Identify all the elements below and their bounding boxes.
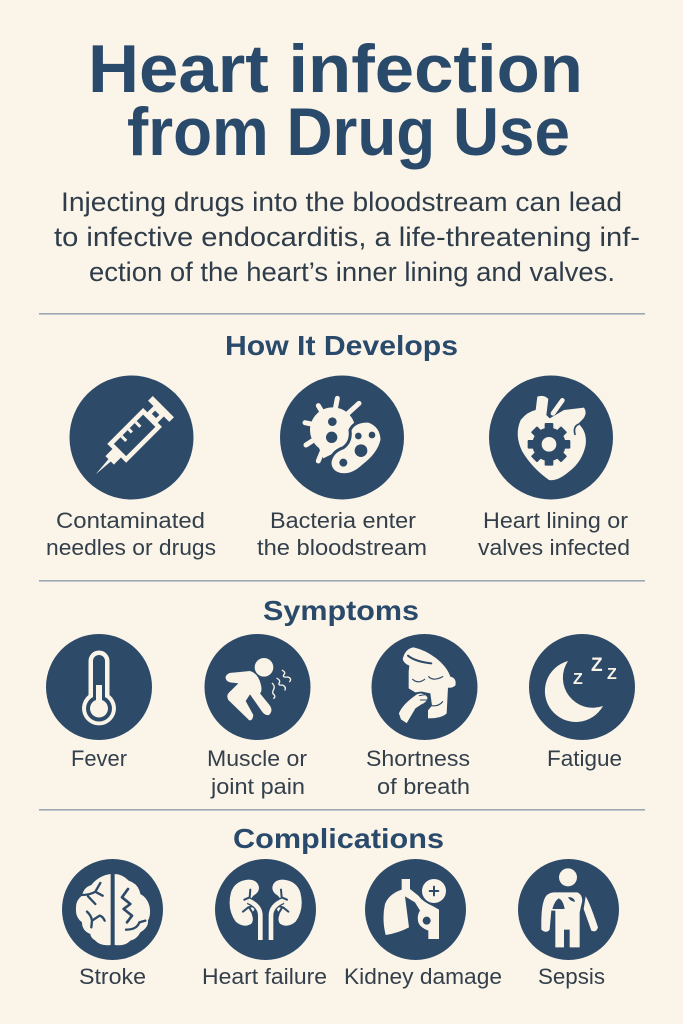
label: heart failure: Heart failure (202, 964, 327, 989)
label: heart lining (478, 508, 630, 560)
icon: moon and z letters: Z (591, 655, 603, 676)
label: muscle pain (207, 746, 307, 799)
icon: heart with gear (489, 376, 613, 500)
icon: moon and z letters: Z (573, 671, 583, 688)
intro text block: ection of the heart’s inner lining and valves. (89, 257, 615, 287)
label: bacteria enter (257, 508, 427, 560)
icon: bacteria and virus (280, 376, 404, 500)
icon: human figure sepsis (518, 859, 619, 960)
intro text block (54, 187, 640, 287)
label: bacteria enter: Bacteria enter (270, 508, 416, 533)
label: shortness of breath (366, 746, 470, 799)
heading: Complications: Complications (233, 823, 444, 854)
icon: moon and z letters: Z (607, 666, 617, 683)
label: stroke: Stroke (79, 964, 146, 989)
intro text block: Injecting drugs into the bloodstream can lead (61, 187, 622, 217)
title: Heart infection (88, 31, 583, 107)
label: contaminated needles (46, 508, 216, 560)
title (88, 31, 583, 170)
label: contaminated needles: Contaminated (56, 508, 205, 533)
label: fatigue: Fatigue (547, 746, 622, 771)
icon: lungs with plus (365, 859, 466, 960)
label: muscle pain: Muscle or (207, 746, 307, 771)
label: sepsis: Sepsis (538, 964, 605, 989)
icon: brain (62, 859, 163, 960)
label: contaminated needles: needles or drugs (46, 535, 216, 560)
intro text block: to infective endocarditis, a life-threatening inf- (54, 222, 640, 252)
label: shortness of breath: of breath (377, 774, 470, 799)
title: from Drug Use (127, 94, 570, 170)
icon: moon and z letters (529, 634, 635, 740)
label: heart lining: valves infected (478, 535, 630, 560)
label: heart lining: Heart lining or (483, 508, 628, 533)
label: fever: Fever (71, 746, 127, 771)
heading: How It Develops: How It Develops (225, 330, 458, 361)
icon: face with hand, breathless (372, 634, 478, 740)
label: shortness of breath: Shortness (366, 746, 470, 771)
icon: muscle pain figure (204, 634, 310, 740)
label: muscle pain: joint pain (210, 774, 305, 799)
label: bacteria enter: the bloodstream (257, 535, 427, 560)
icon: thermometer (46, 634, 152, 740)
icon: syringe (70, 376, 194, 500)
icon: kidneys (215, 859, 316, 960)
label: kidney damage: Kidney damage (344, 964, 502, 989)
heading: Symptoms: Symptoms (263, 595, 419, 626)
